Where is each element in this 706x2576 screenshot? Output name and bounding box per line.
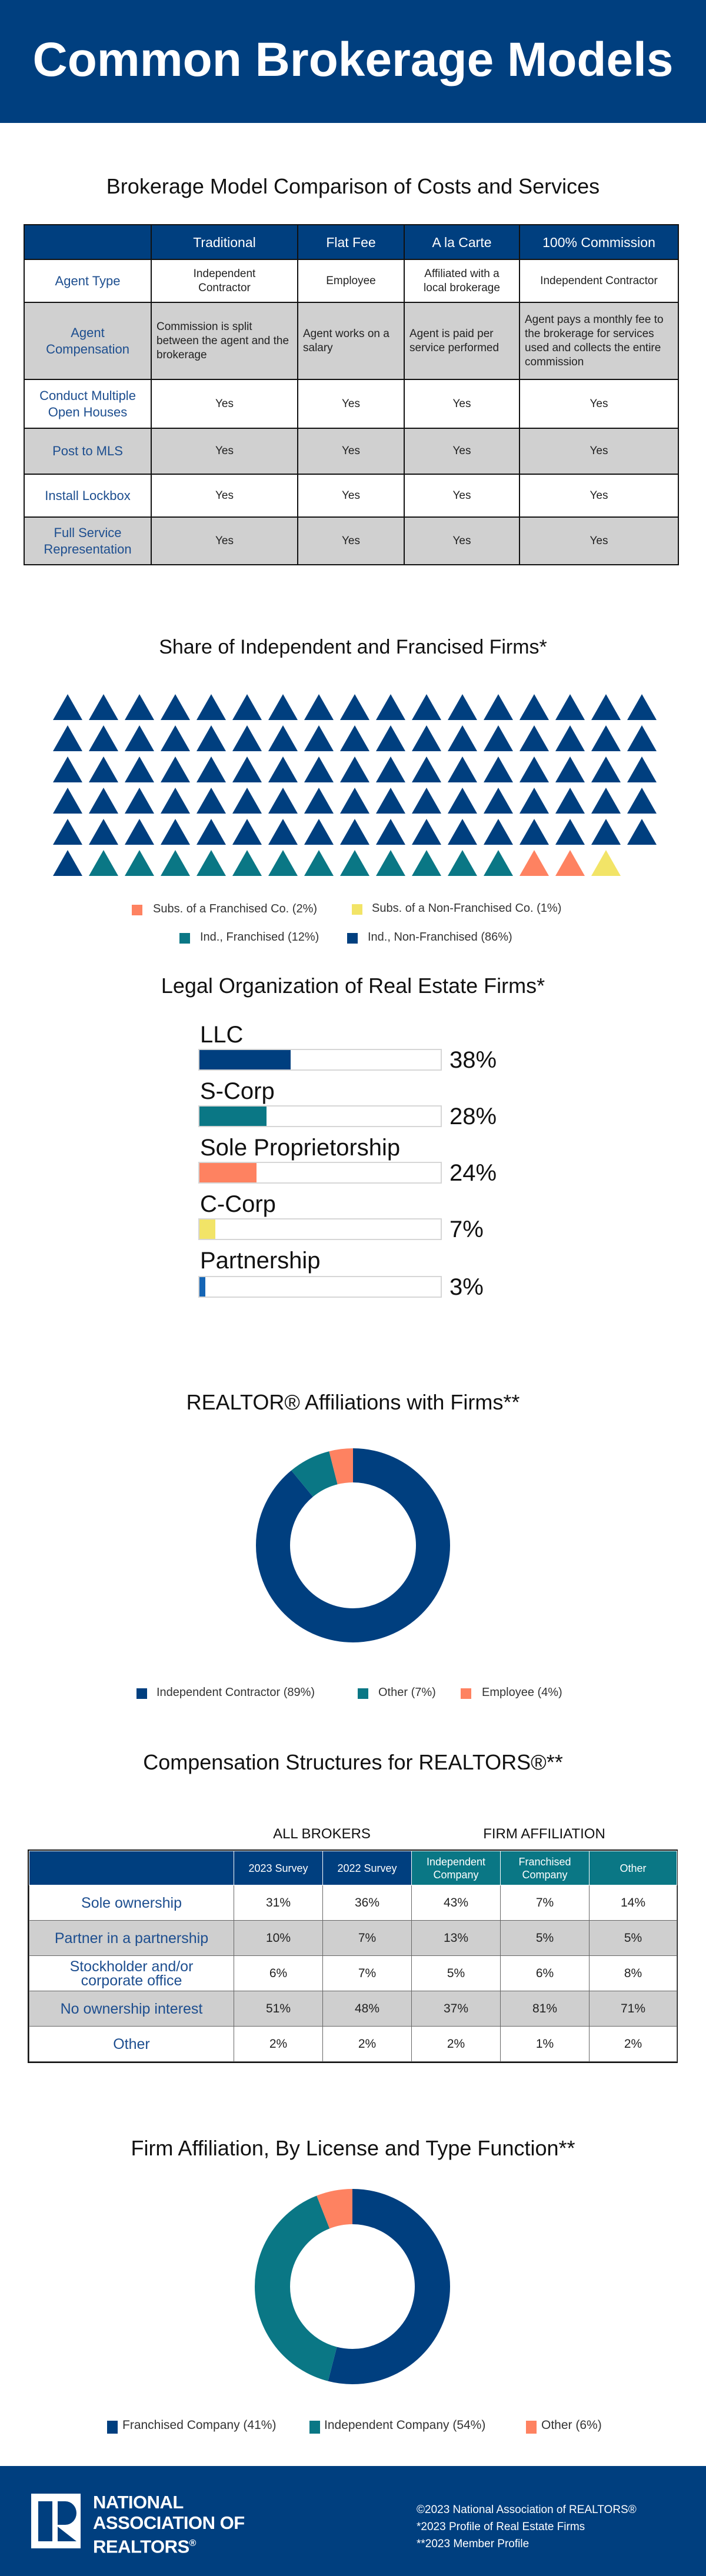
bar chart: legal organization: Partnership [200, 1248, 321, 1274]
header banner [0, 0, 706, 123]
table: compensation structures: Other [113, 2035, 150, 2052]
table: brokerage models: Contractor [198, 281, 251, 294]
logo text: REALTORS® [93, 2536, 196, 2557]
logo text: ASSOCIATION OF [93, 2512, 245, 2533]
table: brokerage models: Yes [215, 398, 234, 409]
table: brokerage models: Agent is paid per service performed [409, 327, 499, 354]
table: brokerage models: Yes [342, 489, 360, 501]
table: brokerage models: Full Service Representation [44, 525, 132, 556]
table: compensation structures: 7% [358, 1966, 376, 1980]
table: brokerage models [24, 224, 679, 565]
table: brokerage models: Traditional [193, 234, 256, 249]
table: brokerage models: Yes [342, 398, 360, 409]
bar chart: legal organization: 38% [449, 1047, 497, 1073]
table: compensation structures: 48% [355, 2001, 379, 2015]
logo text: NATIONAL [93, 2492, 184, 2512]
table: compensation structures: 2% [269, 2037, 287, 2051]
table: compensation structures: Stockholder and/or [70, 1958, 193, 1974]
table: compensation structures: Independent Company [427, 1855, 485, 1880]
table: compensation structures: 1% [536, 2037, 554, 2051]
table: brokerage models: Yes [342, 534, 360, 547]
table: compensation structures: 13% [444, 1931, 468, 1945]
heading: realtor affiliations: REALTOR® Affiliations with Firms** [187, 1390, 519, 1414]
table: brokerage models: local brokerage [424, 281, 500, 294]
table: compensation structures: Franchised Company [518, 1855, 571, 1880]
table: brokerage models: A la Carte [432, 234, 492, 249]
table: brokerage models: Agent Type [55, 273, 120, 288]
table: compensation structures: 8% [624, 1966, 642, 1980]
bar chart: legal organization: C-Corp [200, 1191, 276, 1217]
table: brokerage models: Yes [215, 445, 234, 457]
table: compensation structures: 37% [444, 2001, 468, 2015]
table: brokerage models: Yes [590, 445, 608, 457]
bar chart: legal organization: 3% [449, 1274, 484, 1300]
table: brokerage models: Install Lockbox [45, 488, 131, 502]
legend: affiliations: Other (7%) [378, 1686, 436, 1699]
legend: firm affiliation: Independent Company (54%) [324, 2418, 485, 2432]
legend: firm affiliation: Franchised Company (41%) [122, 2418, 276, 2432]
table: brokerage models: Agent pays a monthly fee to the brokerage for services used and collects the entire commission [525, 313, 664, 368]
table: compensation structures: 2% [447, 2037, 465, 2051]
table: compensation structures: 31% [266, 1895, 291, 1909]
table: brokerage models: Yes [590, 534, 608, 547]
column group labels [273, 1826, 605, 1842]
table: brokerage models: Conduct Multiple Open Houses [39, 388, 136, 419]
table: compensation structures: 7% [358, 1931, 376, 1945]
table: brokerage models: Compensation [46, 341, 129, 356]
bar chart: legal organization: 7% [449, 1217, 484, 1242]
table: compensation structures: Other [620, 1862, 647, 1874]
bar chart: legal organization: 24% [449, 1160, 497, 1186]
table: compensation structures: 6% [536, 1966, 554, 1980]
legend: firm share: Subs. of a Franchised Co. (2%) [153, 902, 317, 915]
heading: firm affiliation: Firm Affiliation, By License and Type Function** [131, 2136, 575, 2160]
table: compensation structures: 2% [358, 2037, 376, 2051]
table: brokerage models: Yes [453, 445, 471, 457]
table: brokerage models: Affiliated with a [424, 267, 499, 280]
heading: share of firms: Share of Independent and Francised Firms* [159, 636, 547, 658]
table: brokerage models: Independent Contractor [540, 274, 658, 287]
table: brokerage models: Agent [71, 325, 105, 340]
table: compensation structures: 10% [266, 1931, 291, 1945]
table: compensation structures: No ownership interest [61, 2000, 202, 2017]
table: brokerage models: Yes [453, 398, 471, 409]
donut chart: affiliations [256, 1448, 450, 1642]
heading: brokerage model comparison: Brokerage Model Comparison of Costs and Services [106, 174, 600, 198]
table: compensation structures: 5% [624, 1931, 642, 1945]
table: compensation structures [28, 1849, 678, 2063]
table: brokerage models: Commission is split between the agent and the brokerage [156, 320, 289, 361]
table: brokerage models: Flat Fee [326, 234, 376, 249]
table: compensation structures: Sole ownership [81, 1894, 182, 1911]
table: brokerage models: Agent works on a salary [303, 327, 389, 354]
legend: affiliations: Employee (4%) [482, 1686, 562, 1699]
heading: legal organization: Legal Organization of Real Estate Firms* [161, 974, 545, 998]
heading: compensation structures: Compensation Structures for REALTORS®** [143, 1750, 563, 1774]
table: compensation structures: 14% [621, 1895, 645, 1909]
table: compensation structures: 36% [355, 1895, 379, 1909]
legend: firm affiliation [107, 2418, 602, 2434]
table: compensation structures: 7% [536, 1895, 554, 1909]
legend: firm share: Ind., Franchised (12%) [200, 931, 319, 944]
table: brokerage models: Independent [194, 267, 255, 280]
sources: *2023 Profile of Real Estate Firms [417, 2521, 585, 2533]
table: compensation structures: corporate office [81, 1972, 182, 1988]
table: brokerage models: Yes [453, 489, 471, 501]
table: compensation structures: 6% [269, 1966, 287, 1980]
table: brokerage models: Yes [590, 398, 608, 409]
legend: affiliations: Independent Contractor (89%) [156, 1686, 315, 1699]
legend: firm affiliation: Other (6%) [541, 2418, 602, 2432]
table: compensation structures: 2023 Survey [248, 1862, 308, 1874]
donut chart: firm affiliation [255, 2189, 450, 2384]
sources: **2023 Member Profile [417, 2538, 529, 2550]
bar chart: legal organization: S-Corp [200, 1078, 275, 1104]
title: Common Brokerage Models [33, 33, 673, 86]
table: compensation structures: 2% [624, 2037, 642, 2051]
table: brokerage models: 100% Commission [542, 234, 655, 249]
table: compensation structures: 2022 Survey [337, 1862, 397, 1874]
bar chart: legal organization: Sole Proprietorship [200, 1135, 400, 1161]
column group labels: FIRM AFFILIATION [483, 1826, 605, 1842]
table: brokerage models: Yes [215, 489, 234, 501]
table: compensation structures: Partner in a partnership [55, 1929, 208, 1946]
bar chart: legal organization: 28% [449, 1104, 497, 1129]
legend: firm share [132, 902, 561, 944]
table: compensation structures: 5% [447, 1966, 465, 1980]
footer [0, 2466, 706, 2576]
sources: ©2023 National Association of REALTORS® [417, 2504, 637, 2516]
table: compensation structures: 5% [536, 1931, 554, 1945]
logo text [93, 2492, 245, 2557]
table: brokerage models: Yes [590, 489, 608, 501]
legend: firm share: Subs. of a Non-Franchised Co. (1%) [372, 902, 561, 915]
logo: NAR R block [31, 2494, 81, 2548]
table: brokerage models: Post to MLS [52, 444, 123, 458]
table: compensation structures: 71% [621, 2001, 645, 2015]
table: brokerage models: Yes [215, 534, 234, 547]
bar chart: legal organization [198, 1022, 497, 1300]
table: compensation structures: 51% [266, 2001, 291, 2015]
legend: affiliations [136, 1686, 562, 1699]
table: brokerage models: Employee [326, 274, 376, 287]
bar chart: legal organization: LLC [200, 1022, 243, 1048]
column group labels: ALL BROKERS [273, 1826, 371, 1842]
table: compensation structures: 43% [444, 1895, 468, 1909]
legend: firm share: Ind., Non-Franchised (86%) [368, 931, 512, 944]
table: compensation structures: 81% [532, 2001, 557, 2015]
chart: triangle pictogram [53, 694, 657, 876]
sources [417, 2504, 637, 2550]
table: brokerage models: Yes [453, 534, 471, 547]
table: brokerage models: Yes [342, 445, 360, 457]
